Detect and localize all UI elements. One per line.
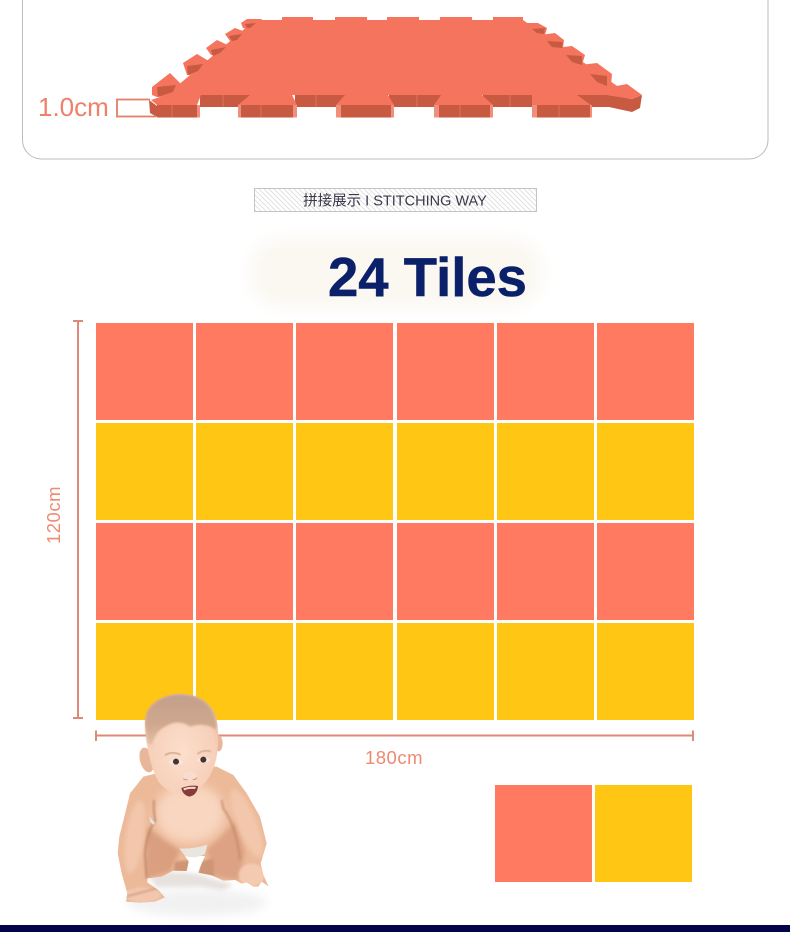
label: 180cm: 180cm bbox=[365, 747, 423, 768]
arrow: horizontal dimension bbox=[96, 730, 693, 741]
title: 24 Tiles bbox=[250, 238, 542, 308]
label: 120cm: 120cm bbox=[43, 486, 64, 544]
section heading: stitching way bbox=[254, 188, 536, 212]
icon: crawling baby bbox=[118, 694, 270, 916]
label: mat thickness 1.0cm bbox=[38, 92, 156, 122]
single tiles: colour sample pair bbox=[495, 785, 692, 882]
icon: foam mat tile in perspective bbox=[149, 17, 642, 118]
section heading: stitching way: 拼接展示 I STITCHING WAY bbox=[303, 192, 487, 210]
panel: rounded product card bbox=[22, 0, 768, 159]
title: 24 Tiles: 24 Tiles bbox=[328, 247, 527, 308]
arrow: vertical dimension bbox=[73, 321, 83, 718]
label: mat thickness 1.0cm: 1.0cm bbox=[38, 92, 109, 122]
tile grid: 6 by 4 bbox=[96, 323, 694, 720]
footer band bbox=[0, 925, 790, 932]
